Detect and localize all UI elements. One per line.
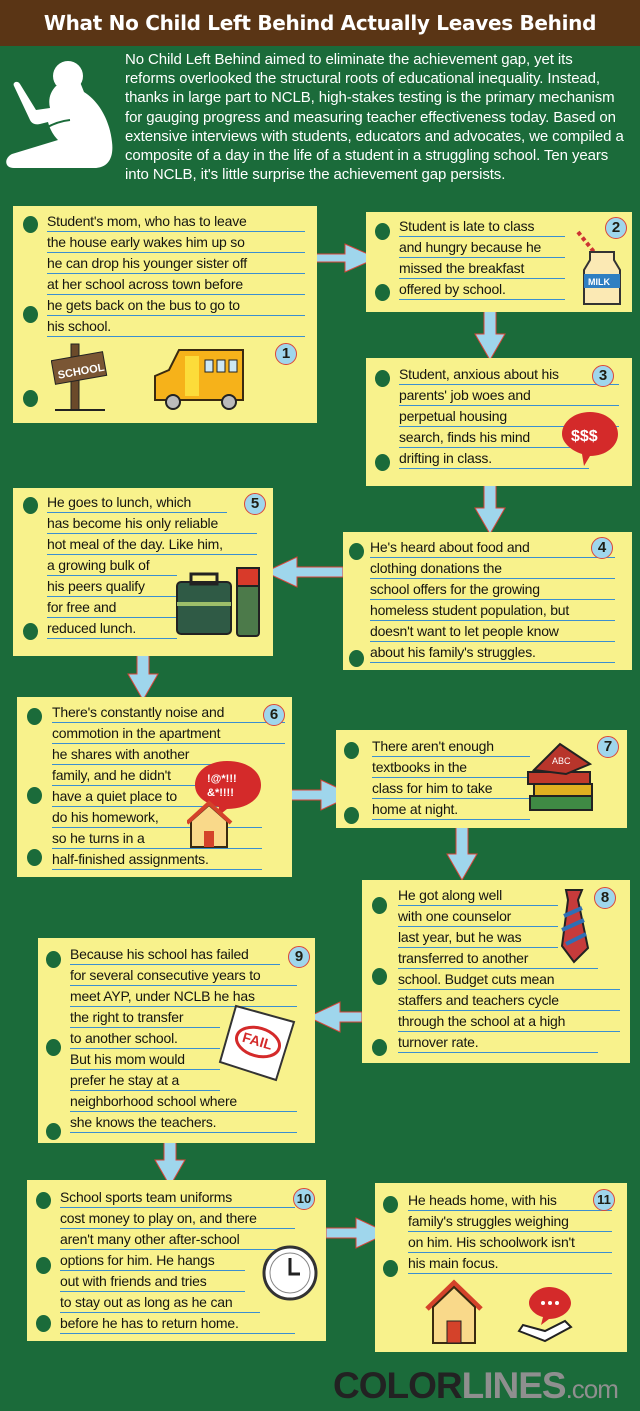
panel 4: homeless student population, but	[370, 602, 569, 618]
panel 2: offered by school.	[399, 281, 506, 297]
arrow 6 to 7	[285, 780, 353, 810]
panel 9: Because his school has failed	[70, 946, 249, 962]
panel 9: she knows the teachers.	[70, 1114, 216, 1130]
arrow 9 to 10	[155, 1140, 185, 1186]
panel 5: reduced lunch.	[47, 620, 136, 636]
icon: milk bottle: MILK	[588, 277, 610, 287]
panel 10: cost money to play on, and there	[60, 1210, 257, 1226]
icon: house	[425, 1280, 483, 1344]
icon: milk bottle	[576, 230, 621, 305]
panel 2	[366, 212, 632, 312]
panel 9: to another school.	[70, 1030, 178, 1046]
number 7	[597, 736, 619, 758]
panel 4: school offers for the growing	[370, 581, 540, 597]
icon: house with angry speech bubble	[187, 761, 261, 848]
intro text: for gauging progress and measuring teacher effectiveness today. Based on	[125, 109, 616, 126]
number 10	[293, 1188, 315, 1210]
panel 5: hot meal of the day. Like him,	[47, 536, 223, 552]
number 11	[593, 1189, 615, 1211]
number 6: 6	[270, 706, 278, 723]
panel 5: He goes to lunch, which	[47, 494, 191, 510]
panel 2: and hungry because he	[399, 239, 541, 255]
panel 10	[27, 1180, 326, 1341]
panel 6	[17, 697, 292, 877]
panel 4: doesn't want to let people know	[370, 623, 559, 639]
number 7: 7	[604, 738, 612, 755]
panel 1: the house early wakes him up so	[47, 234, 245, 250]
panel 1: his school.	[47, 318, 111, 334]
panel 8: turnover rate.	[398, 1034, 478, 1050]
panel 6: so he turns in a	[52, 830, 145, 846]
panel 9: neighborhood school where	[70, 1093, 237, 1109]
panel 9	[38, 938, 315, 1143]
panel 8: school. Budget cuts mean	[398, 971, 554, 987]
number 3: 3	[599, 367, 607, 384]
number 5	[244, 493, 266, 515]
arrow 4 to 5	[265, 557, 343, 587]
panel 6: half-finished assignments.	[52, 851, 209, 867]
arrow 3 to 4	[475, 480, 505, 534]
arrow 1 to 2	[307, 244, 377, 272]
panel 4: clothing donations the	[370, 560, 502, 576]
arrow 7 to 8	[447, 826, 477, 880]
icon: lunch box and thermos	[176, 567, 260, 637]
panel 6: commotion in the apartment	[52, 725, 220, 741]
arrow 2 to 3	[475, 308, 505, 360]
intro text: thanks in large part to NCLB, high-stakes testing is the primary mechanism	[125, 89, 614, 106]
panel 10: aren't many other after-school	[60, 1231, 240, 1247]
icon: house with angry speech bubble: !@*!!!	[207, 773, 237, 785]
panel 5: a growing bulk of	[47, 557, 149, 573]
icon: money speech bubble: $$$	[571, 428, 598, 445]
icon: school sign: SCHOOL	[57, 362, 106, 382]
intro text: extensive interviews with students, educators and advocates, we compiled a	[125, 128, 624, 145]
panel 1: he can drop his younger sister off	[47, 255, 247, 271]
arrow 5 to 6	[128, 650, 158, 700]
panel 7: class for him to take	[372, 780, 492, 796]
panel 9: for several consecutive years to	[70, 967, 260, 983]
panel 3: Student, anxious about his	[399, 366, 559, 382]
panel 10: out with friends and tries	[60, 1273, 207, 1289]
number 8: 8	[601, 889, 609, 906]
panel 8	[362, 880, 630, 1063]
number 9: 9	[295, 948, 303, 965]
icon: stack of books: ABC	[552, 756, 571, 766]
number 10: 10	[297, 1191, 311, 1206]
icon: necktie	[561, 889, 590, 964]
panel 1	[13, 206, 317, 423]
number 2: 2	[612, 219, 620, 236]
intro text	[125, 51, 624, 183]
number 4	[591, 537, 613, 559]
icon: school bus	[154, 349, 244, 410]
icon: book with speech bubble	[518, 1287, 573, 1342]
panel 5: his peers qualify	[47, 578, 145, 594]
number 5: 5	[251, 495, 259, 512]
arrow 10 to 11	[326, 1218, 388, 1248]
panel 7	[336, 730, 627, 828]
panel 4: He's heard about food and	[370, 539, 530, 555]
panel 8: through the school at a high	[398, 1013, 565, 1029]
intro text: reforms overlooked the structural roots of educational inequality. Instead,	[125, 70, 600, 87]
title bar	[0, 0, 640, 46]
panel 8: staffers and teachers cycle	[398, 992, 559, 1008]
panel 6: family, and he didn't	[52, 767, 171, 783]
panel 11: He heads home, with his	[408, 1192, 557, 1208]
panel 9: prefer he stay at a	[70, 1072, 179, 1088]
number 8	[594, 887, 616, 909]
icon: stack of books	[527, 742, 593, 811]
number 6	[263, 704, 285, 726]
panel 4	[343, 532, 632, 670]
intro text: No Child Left Behind aimed to eliminate the achievement gap, yet its	[125, 51, 573, 68]
arrow 8 to 9	[308, 1002, 362, 1032]
panel 5: for free and	[47, 599, 116, 615]
panel 8: transferred to another	[398, 950, 528, 966]
panel 8: last year, but he was	[398, 929, 521, 945]
panel 1: he gets back on the bus to go to	[47, 297, 240, 313]
icon: house with angry speech bubble: &*!!!!	[207, 787, 234, 799]
number 11: 11	[597, 1192, 611, 1207]
panel 11	[375, 1183, 627, 1352]
panel 1: Student's mom, who has to leave	[47, 213, 247, 229]
panel 3: drifting in class.	[399, 450, 492, 466]
intro text: composite of a day in the life of a student in a struggling school. Ten years	[125, 147, 608, 164]
number 1: 1	[282, 345, 290, 362]
panel 3: parents' job woes and	[399, 387, 531, 403]
number 4: 4	[598, 539, 606, 556]
panel 6: do his homework,	[52, 809, 159, 825]
panel 10: to stay out as long as he can	[60, 1294, 232, 1310]
panel 2: Student is late to class	[399, 218, 534, 234]
icon: money speech bubble	[562, 412, 618, 466]
panel 2: missed the breakfast	[399, 260, 524, 276]
panel 10: options for him. He hangs	[60, 1252, 215, 1268]
number 1	[275, 343, 297, 365]
panel 7: There aren't enough	[372, 738, 494, 754]
icon: school sign	[51, 344, 108, 411]
icon: failed test paper	[218, 1004, 296, 1082]
panel 6: he shares with another	[52, 746, 189, 762]
panel 5: has become his only reliable	[47, 515, 218, 531]
panel 8: He got along well	[398, 887, 502, 903]
panel 11: family's struggles weighing	[408, 1213, 569, 1229]
panel 3: search, finds his mind	[399, 429, 530, 445]
panel 7: home at night.	[372, 801, 458, 817]
panel 6: have a quiet place to	[52, 788, 177, 804]
panel 1: at her school across town before	[47, 276, 243, 292]
panel 6: There's constantly noise and	[52, 704, 224, 720]
panel 9: meet AYP, under NCLB he has	[70, 988, 255, 1004]
number 2	[605, 217, 627, 239]
panel 11: his main focus.	[408, 1255, 498, 1271]
panel 4: about his family's struggles.	[370, 644, 536, 660]
panel 8: with one counselor	[398, 908, 511, 924]
number 9	[288, 946, 310, 968]
panel 5	[13, 488, 273, 656]
panel 11: on him. His schoolwork isn't	[408, 1234, 575, 1250]
panel 9: But his mom would	[70, 1051, 185, 1067]
panel 10: School sports team uniforms	[60, 1189, 232, 1205]
icon: failed test paper: FAIL	[241, 1029, 275, 1053]
icon: reading child silhouette	[6, 61, 112, 168]
panel 3	[366, 358, 632, 486]
title bar: What No Child Left Behind Actually Leaves Behind	[44, 11, 596, 35]
intro text: into NCLB, it's little surprise the achievement gap persists.	[125, 166, 505, 183]
number 3	[592, 365, 614, 387]
panel 7: textbooks in the	[372, 759, 467, 775]
logo: COLORLINES.com: COLORLINES.com	[333, 1365, 618, 1406]
panel 10: before he has to return home.	[60, 1315, 239, 1331]
panel 3: perpetual housing	[399, 408, 507, 424]
icon: clock	[262, 1246, 318, 1300]
panel 9: the right to transfer	[70, 1009, 183, 1025]
